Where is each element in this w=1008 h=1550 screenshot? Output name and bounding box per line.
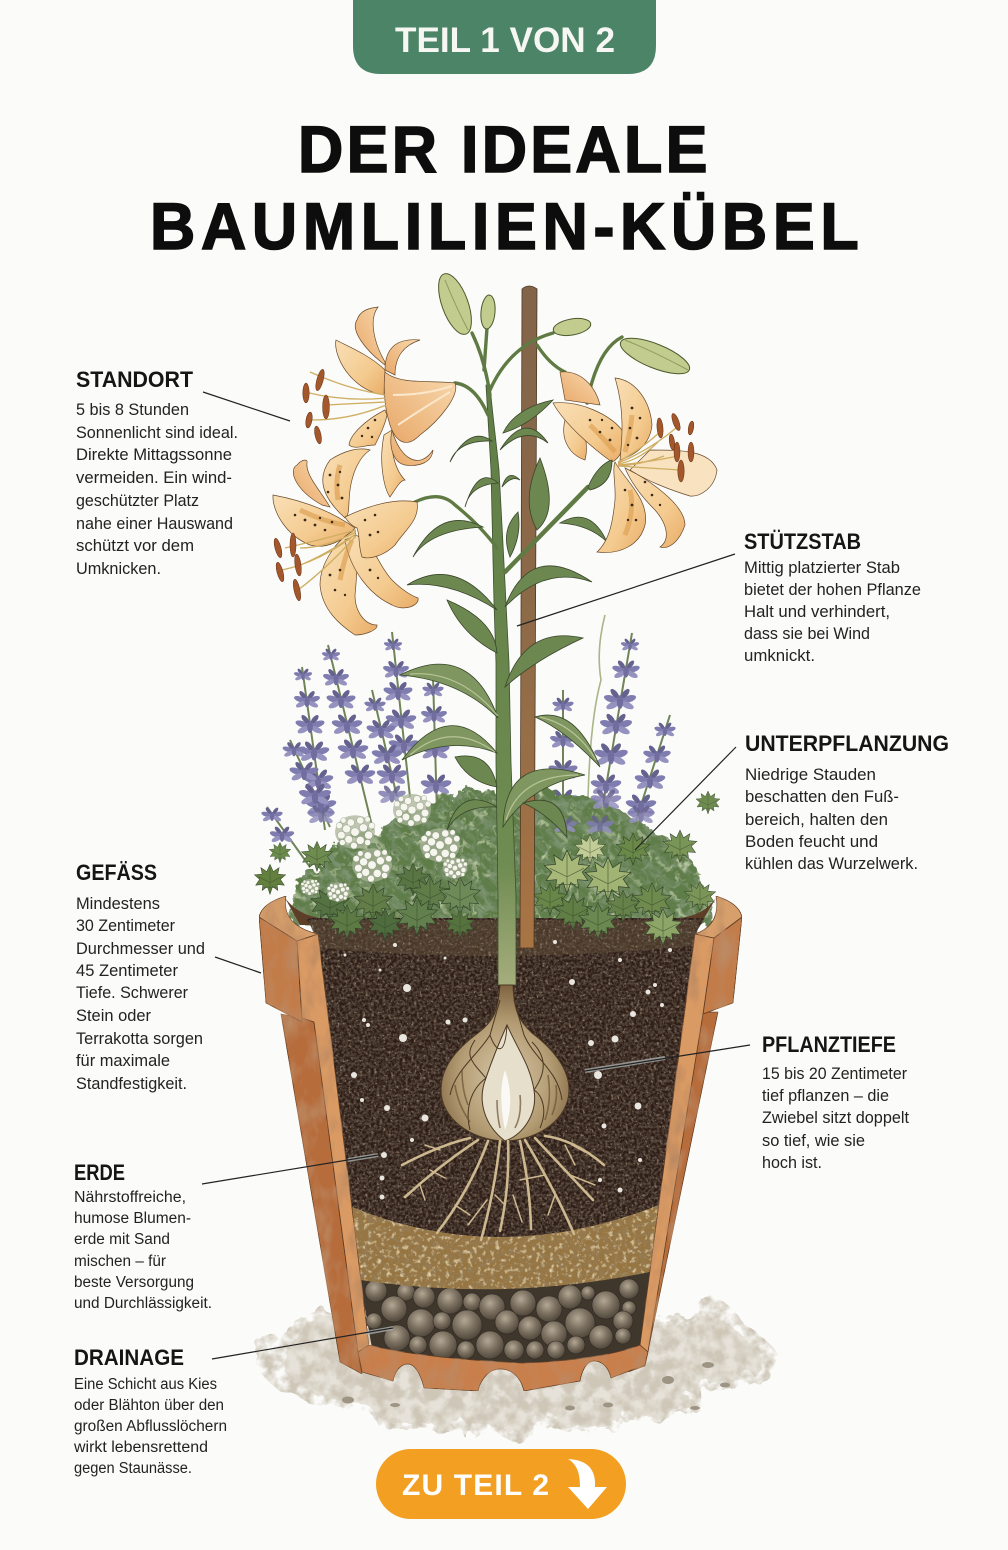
title: DER IDEALE bbox=[298, 113, 707, 186]
callout: Gefäß: 30 Zentimeter bbox=[76, 917, 175, 935]
stray thin sprig bbox=[588, 615, 605, 800]
background foliage mass bbox=[290, 789, 712, 925]
front foliage and white flowers bbox=[254, 791, 720, 946]
pot back rim bbox=[285, 898, 716, 925]
callout: Erde: und Durchlässigkeit. bbox=[74, 1295, 212, 1312]
callout: Gefäß: für maximale bbox=[76, 1052, 170, 1070]
callout: Erde: mischen – für bbox=[74, 1253, 166, 1270]
callout: Pflanztiefe: Zwiebel sitzt doppelt bbox=[762, 1109, 909, 1127]
callout: Gefäß: Standfestigkeit. bbox=[76, 1075, 187, 1093]
callout: Drainage: oder Blähton über den bbox=[74, 1397, 224, 1414]
lily leaves bbox=[400, 400, 607, 837]
callout: Drainage: gegen Staunässe. bbox=[74, 1460, 192, 1477]
callout: Erde: erde mit Sand bbox=[74, 1231, 170, 1248]
soil layer bbox=[305, 918, 705, 1237]
flower stalks and bud stems bbox=[415, 328, 622, 572]
callout: Gefäß: Tiefe. Schwerer bbox=[76, 984, 188, 1002]
lily stem bbox=[486, 385, 516, 985]
perlite specks bbox=[344, 940, 672, 1200]
drainage clay balls bbox=[358, 1270, 650, 1368]
title bbox=[150, 113, 859, 263]
callout: Standort: 5 bis 8 Stunden bbox=[76, 401, 189, 419]
callout: Unterpflanzung: kühlen das Wurzelwerk. bbox=[745, 855, 918, 873]
callout: Unterpflanzung: Niedrige Stauden bbox=[745, 766, 876, 784]
support stake bbox=[520, 286, 537, 948]
lavender in front of foliage bbox=[306, 784, 656, 834]
callout: Standort: Umknicken. bbox=[76, 560, 161, 578]
sand layer bbox=[348, 1190, 662, 1289]
callout: Gefäß: Mindestens bbox=[76, 895, 160, 913]
callout: Unterpflanzung bbox=[635, 731, 949, 873]
badge: Teil 1 von 2: TEIL 1 VON 2 bbox=[395, 21, 615, 60]
callout: Pflanztiefe: hoch ist. bbox=[762, 1154, 822, 1172]
callout: Pflanztiefe: PFLANZTIEFE bbox=[762, 1032, 896, 1057]
callout: Pflanztiefe: so tief, wie sie bbox=[762, 1132, 865, 1150]
pot right wall bbox=[628, 896, 742, 1372]
callout: Erde: ERDE bbox=[74, 1160, 125, 1185]
callout: Standort: schützt vor dem bbox=[76, 537, 194, 555]
callout: Standort: geschützter Platz bbox=[76, 492, 199, 510]
lily flower: upper left bbox=[303, 307, 456, 497]
callout: Stützstab: umknickt. bbox=[744, 647, 815, 665]
callout: Standort: Sonnenlicht sind ideal. bbox=[76, 424, 238, 442]
callout: Unterpflanzung: UNTERPFLANZUNG bbox=[745, 731, 949, 756]
callout: Standort: vermeiden. Ein wind- bbox=[76, 469, 232, 487]
callout: Stützstab: Mittig platzierter Stab bbox=[744, 559, 900, 577]
callout: Unterpflanzung: Boden feucht und bbox=[745, 833, 878, 851]
title: BAUMLILIEN-KÜBEL bbox=[150, 190, 859, 263]
callout: Standort bbox=[76, 367, 290, 578]
callout: Erde bbox=[74, 1155, 378, 1312]
callout: Unterpflanzung: beschatten den Fuß- bbox=[745, 788, 899, 806]
callout: Standort: STANDORT bbox=[76, 367, 194, 392]
badge: Teil 1 von 2 bbox=[353, 0, 656, 74]
button: Zu Teil 2 bbox=[376, 1449, 626, 1519]
callout: Drainage: DRAINAGE bbox=[74, 1345, 184, 1370]
callout: Gefäß: Stein oder bbox=[76, 1007, 152, 1025]
callout: Stützstab: Halt und verhindert, bbox=[744, 603, 890, 621]
callout: Erde: beste Versorgung bbox=[74, 1274, 194, 1291]
bulb bbox=[441, 985, 569, 1141]
callout: Gefäß bbox=[76, 860, 261, 1093]
callout: Gefäß: GEFÄSS bbox=[76, 860, 157, 885]
ground shadow under pot bbox=[262, 1302, 778, 1434]
callout: Pflanztiefe bbox=[585, 1032, 909, 1172]
callout: Drainage bbox=[73, 1328, 393, 1477]
callout: Unterpflanzung: bereich, halten den bbox=[745, 811, 888, 829]
callout: Erde: Nährstoffreiche, bbox=[74, 1189, 186, 1206]
callout: Stützstab: bietet der hohen Pflanze bbox=[744, 581, 921, 599]
callout: Standort: nahe einer Hauswand bbox=[76, 515, 233, 533]
callout: Drainage: wirkt lebensrettend bbox=[73, 1439, 208, 1456]
pot left wall bbox=[259, 896, 369, 1374]
callout: Stützstab: STÜTZSTAB bbox=[744, 529, 861, 554]
callout: Stützstab: dass sie bei Wind bbox=[744, 625, 870, 643]
lavender spikes bbox=[261, 632, 676, 867]
callout: Drainage: Eine Schicht aus Kies bbox=[74, 1376, 217, 1393]
lily buds bbox=[432, 269, 694, 381]
roots bbox=[402, 1136, 604, 1240]
lily flower: lower left bbox=[273, 449, 418, 635]
pot base with drainage holes bbox=[358, 1345, 648, 1391]
terracotta pot bbox=[259, 896, 742, 1391]
callout: Stützstab bbox=[517, 529, 921, 665]
button: Zu Teil 2: ZU TEIL 2 bbox=[402, 1469, 549, 1502]
callout: Pflanztiefe: 15 bis 20 Zentimeter bbox=[762, 1065, 907, 1083]
callout: Gefäß: 45 Zentimeter bbox=[76, 962, 179, 980]
callout: Pflanztiefe: tief pflanzen – die bbox=[762, 1087, 889, 1105]
icon: curved down arrow bbox=[568, 1459, 607, 1509]
callout: Gefäß: Durchmesser und bbox=[76, 940, 205, 958]
callout: Gefäß: Terrakotta sorgen bbox=[76, 1030, 203, 1048]
lily flower: right bbox=[553, 372, 717, 553]
callout: Standort: Direkte Mittagssonne bbox=[76, 446, 232, 464]
callout: Drainage: großen Abflusslöchern bbox=[74, 1418, 227, 1435]
callout: Erde: humose Blumen- bbox=[74, 1210, 191, 1227]
